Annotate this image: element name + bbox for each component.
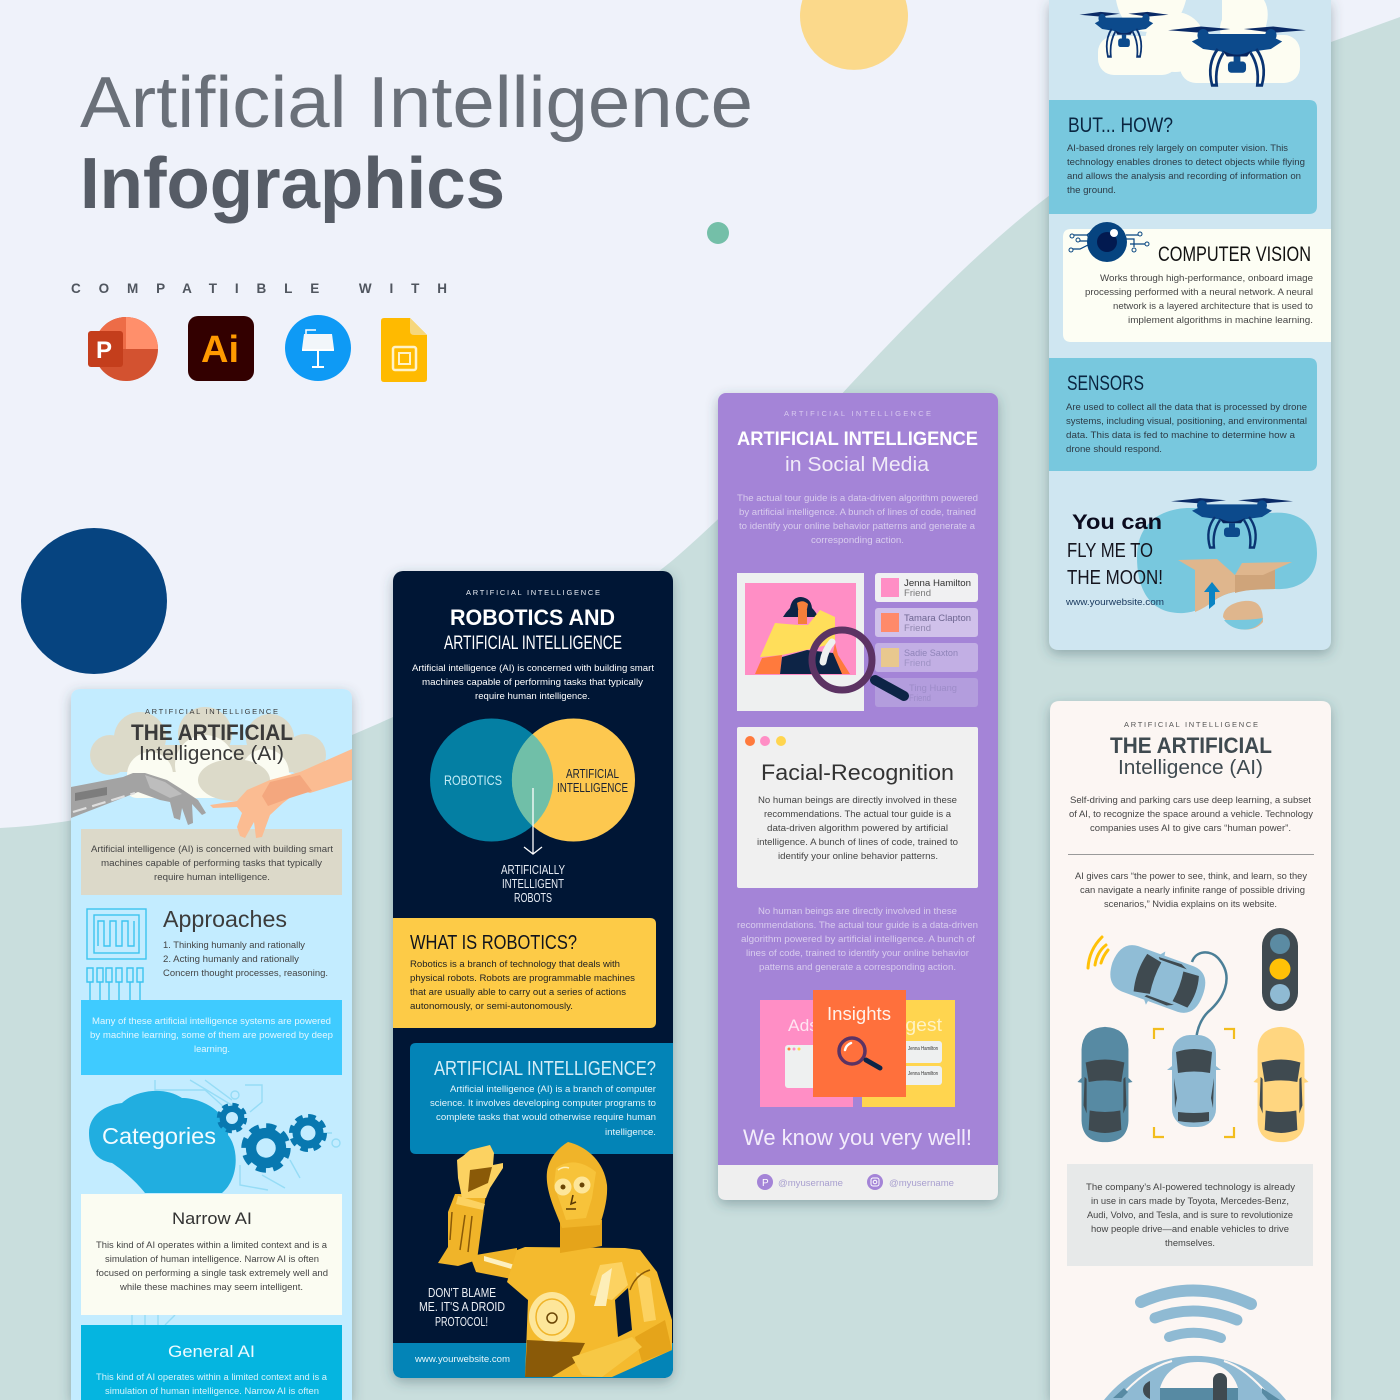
call to action text: www.yourwebsite.com xyxy=(1065,597,1164,608)
what is robotics box: that are usually able to carry out a series of actions xyxy=(410,987,626,998)
artificial intelligence box xyxy=(410,1043,673,1154)
info box: Audi, Volvo, and Tesla, and is sure to revolutionize xyxy=(1087,1210,1293,1221)
sensors box: SENSORS xyxy=(1067,372,1144,395)
info box: how people drive—and enable vehicles to drive xyxy=(1091,1224,1289,1235)
cards: ads, digest, insights xyxy=(760,990,955,1107)
car: right xyxy=(1253,1027,1309,1142)
paragraph: recommendations. The actual tour guide is a data-driven xyxy=(737,920,978,931)
approaches text: 1. Thinking humanly and rationally xyxy=(163,940,305,951)
list item: sadie: Sadie Saxton xyxy=(904,648,958,659)
car: center xyxy=(1167,1035,1221,1127)
venn diagram xyxy=(430,718,635,905)
icon: illustrator: Ai xyxy=(201,329,239,371)
machine learning box: Many of these artificial intelligence systems are powered xyxy=(92,1016,331,1027)
paragraph two: can navigate a nearly infinite range of possible driving xyxy=(1080,885,1305,896)
head xyxy=(547,1142,607,1228)
panel: drones xyxy=(1049,0,1331,650)
sensors box: Are used to collect all the data that is processed by drone xyxy=(1066,402,1307,413)
paragraph two: AI gives cars “the power to see, think, and learn, so they xyxy=(1075,871,1307,882)
machine learning box: learning. xyxy=(194,1044,230,1055)
computer vision box: processing performed with a neural network. A neural xyxy=(1085,287,1313,298)
venn diagram: ARTIFICIALLY xyxy=(501,862,565,877)
artificial intelligence box: science. It involves developing computer programs to xyxy=(430,1098,656,1109)
footer: P xyxy=(762,1178,769,1189)
friends list xyxy=(875,573,978,707)
approaches text: 2. Acting humanly and rationally xyxy=(163,954,299,965)
intro box xyxy=(81,829,342,895)
illustration: robot hand xyxy=(71,773,206,825)
slogan: We know you very well! xyxy=(743,1125,972,1150)
paragraph one xyxy=(1069,795,1313,834)
heading: ARTIFICIAL INTELLIGENCE xyxy=(466,588,600,597)
icon: signal arcs xyxy=(1088,937,1108,968)
icon: eye with circuits xyxy=(1069,222,1149,262)
info box: in use in cars made by Toyota, Mercedes-Benz, xyxy=(1091,1196,1289,1207)
illustration: clouds and drones xyxy=(1079,0,1306,85)
list item: ting: Ting Huang xyxy=(909,683,957,694)
card: digest xyxy=(862,1000,955,1107)
list item: tamara xyxy=(875,608,978,637)
paragraph: No human beings are directly involved in these xyxy=(758,906,957,917)
parking path xyxy=(1192,952,1227,1040)
footer band xyxy=(393,1343,673,1378)
list item: jenna: Jenna Hamilton xyxy=(904,578,971,589)
what is robotics box: WHAT IS ROBOTICS? xyxy=(410,932,577,954)
heading: by artificial intelligence. A bunch of lines of code, trained xyxy=(739,507,976,518)
list item: ting: Friend xyxy=(909,693,931,704)
approaches text xyxy=(163,906,328,979)
raised hand xyxy=(457,1145,503,1198)
paragraph: patterns and generate a corresponding action. xyxy=(759,962,956,973)
facial recognition box: recommendations. The actual tour guide is a xyxy=(764,809,952,820)
call to action text: You can xyxy=(1072,511,1162,534)
list item: jenna xyxy=(875,573,978,602)
card: digest: Digest xyxy=(887,1015,942,1035)
what is robotics box: autonomously, or semi-autonomously. xyxy=(410,1001,573,1012)
heading: ARTIFICIAL INTELLIGENCE xyxy=(1124,720,1258,729)
torso xyxy=(507,1247,672,1377)
heading xyxy=(1110,720,1272,779)
panel: the artificial intelligence xyxy=(71,689,352,1400)
but how box: technology enables drones to detect objects while flying xyxy=(1067,157,1305,168)
info box xyxy=(1067,1164,1313,1266)
heading: The actual tour guide is a data-driven algorithm powered xyxy=(737,493,978,504)
categories illustration: Categories xyxy=(102,1123,216,1149)
footer: @myusername xyxy=(889,1178,954,1189)
illustration: cars xyxy=(1077,928,1309,1142)
artificial intelligence box: complete tasks that would otherwise require human xyxy=(436,1112,656,1123)
intro box: Artificial intelligence (AI) is concerned with building smart xyxy=(91,844,333,855)
intro box: require human intelligence. xyxy=(154,872,270,883)
facial recognition box xyxy=(737,727,978,888)
venn diagram: ROBOTS xyxy=(514,890,552,905)
heading: Artificial intelligence (AI) is concerned with building smart xyxy=(412,663,654,674)
but how box xyxy=(1049,100,1317,214)
venn diagram: INTELLIGENT xyxy=(502,876,564,891)
robot speech text: ME. IT'S A DROID xyxy=(419,1299,505,1314)
but how box: BUT... HOW? xyxy=(1068,114,1173,137)
icon: circuit chip xyxy=(87,909,146,1000)
heading: in Social Media xyxy=(785,454,930,476)
panel: robotics xyxy=(393,571,673,1378)
title: Artificial Intelligence xyxy=(80,63,753,143)
approaches text: Approaches xyxy=(163,906,287,932)
narrow ai box: Narrow AI xyxy=(172,1209,252,1228)
sensors box: drone should respond. xyxy=(1066,444,1162,455)
neck xyxy=(560,1220,602,1253)
heading: corresponding action. xyxy=(811,535,904,546)
illustration: human hand xyxy=(210,749,352,838)
list item: sadie xyxy=(875,643,978,672)
computer vision box: network is a layered architecture that is used to xyxy=(1113,301,1313,312)
computer vision box: Works through high-performance, onboard image xyxy=(1100,273,1313,284)
call to action text xyxy=(1065,511,1164,608)
heading: require human intelligence. xyxy=(475,691,590,702)
heading: machines capable of performing tasks that typically xyxy=(422,677,643,688)
paragraph two: scenarios,” Nvidia explains on its website. xyxy=(1104,899,1277,910)
list item: tamara: Tamara Clapton xyxy=(904,613,971,624)
car: moving xyxy=(1103,936,1212,1022)
facial recognition box: identify your online behavior patterns. xyxy=(778,851,938,862)
card: ads: Ads xyxy=(788,1016,818,1035)
narrow ai box: focused on performing a single task extremely well and xyxy=(96,1268,328,1279)
computer vision box: COMPUTER VISION xyxy=(1158,243,1311,266)
card: digest: Jenna Hamilton xyxy=(908,1046,938,1052)
paragraph one: of AI, to recognize the space around a vehicle. Technology xyxy=(1069,809,1313,820)
heading: ARTIFICIAL INTELLIGENCE xyxy=(737,429,978,450)
narrow ai box: simulation of human intelligence. Narrow AI is often xyxy=(105,1254,319,1265)
icon: google slides xyxy=(381,318,427,382)
footer: @myusername xyxy=(778,1178,843,1189)
heading xyxy=(412,588,654,702)
title text: THE ARTIFICIAL xyxy=(131,720,293,745)
approaches text: Concern thought processes, reasoning. xyxy=(163,968,328,979)
forearm xyxy=(438,1194,486,1266)
heading: ARTIFICIAL INTELLIGENCE xyxy=(784,409,931,418)
illustration: gold robot xyxy=(438,1142,672,1377)
sensors box: systems, including visual, positioning, and environmental xyxy=(1066,416,1307,427)
venn diagram: INTELLIGENCE xyxy=(557,780,628,795)
but how box: AI-based drones rely largely on computer vision. This xyxy=(1067,143,1288,154)
general ai box xyxy=(81,1325,342,1400)
list item: tamara: Friend xyxy=(904,623,931,634)
general ai box: This kind of AI operates within a limited context and is a xyxy=(96,1372,328,1383)
but how box: and allows the analysis and recording of information on xyxy=(1067,171,1301,182)
card: insights xyxy=(813,990,906,1097)
footer band: www.yourwebsite.com xyxy=(414,1354,510,1365)
heading: to identify your online behavior patterns and generate a xyxy=(739,521,976,532)
decorative circle: navy xyxy=(21,528,167,674)
icon: powerpoint xyxy=(88,317,158,381)
info box: themselves. xyxy=(1165,1238,1215,1249)
illustration: photo with magnifier xyxy=(737,573,904,711)
icon: keynote xyxy=(285,315,351,381)
general ai box: General AI xyxy=(168,1342,255,1361)
robot speech text: PROTOCOL! xyxy=(435,1314,488,1329)
computer vision box: implement algorithms in machine learning. xyxy=(1128,315,1313,326)
facial recognition box: Facial-Recognition xyxy=(761,760,954,785)
what is robotics box: Robotics is a branch of technology that deals with xyxy=(410,959,620,970)
machine learning box: by machine learning, some of them are powered by deep xyxy=(90,1030,333,1041)
belly and right hand xyxy=(525,1340,585,1377)
paragraph one: companies uses AI to give cars “human power”. xyxy=(1090,823,1291,834)
but how box: the ground. xyxy=(1067,185,1116,196)
machine learning box xyxy=(81,1000,342,1075)
sensors box: data. This data is fed to machine to determine how a xyxy=(1066,430,1296,441)
robot speech text xyxy=(419,1285,505,1329)
list item: ting xyxy=(875,678,978,707)
list item: jenna: Friend xyxy=(904,588,931,599)
icon: wifi arcs xyxy=(1141,1290,1251,1338)
artificial intelligence box: ARTIFICIAL INTELLIGENCE? xyxy=(434,1058,656,1080)
icon: powerpoint: P xyxy=(96,337,112,364)
heading: Intelligence (AI) xyxy=(1118,757,1263,779)
card: ads xyxy=(760,1000,853,1107)
title text xyxy=(131,707,293,765)
narrow ai box xyxy=(81,1194,342,1315)
heading: ROBOTICS AND xyxy=(450,605,615,630)
narrow ai box: This kind of AI operates within a limited context and is a xyxy=(96,1240,328,1251)
title text: ARTIFICIAL INTELLIGENCE xyxy=(145,707,278,716)
info box: The company’s AI-powered technology is already xyxy=(1086,1182,1295,1193)
call to action text: FLY ME TO xyxy=(1067,540,1153,562)
title: Infographics xyxy=(80,144,505,224)
what is robotics box: physical robots. Robots are programmable machines xyxy=(410,973,635,984)
paragraph: lines of code, trained to identify your online behavior xyxy=(746,948,970,959)
panel: self-driving cars xyxy=(1050,701,1331,1400)
paragraph xyxy=(737,906,978,973)
intro box: machines capable of performing tasks that typically xyxy=(101,858,322,869)
card: digest: Jenna Hamilton xyxy=(908,1071,938,1077)
facial recognition box: intelligence. A bunch of lines of code, trained to xyxy=(757,837,958,848)
chest disc xyxy=(529,1292,575,1342)
upper arm xyxy=(470,1248,517,1280)
facial recognition box: data-driven algorithm powered by artificial xyxy=(767,823,948,834)
artificial intelligence box: Artificial intelligence (AI) is a branch of computer xyxy=(450,1084,657,1095)
venn diagram: ARTIFICIAL xyxy=(566,766,619,781)
title xyxy=(80,63,753,224)
computer vision box xyxy=(1063,222,1331,342)
paragraph one: Self-driving and parking cars use deep learning, a subset xyxy=(1070,795,1311,806)
what is robotics box xyxy=(393,918,656,1028)
illustration: car dome xyxy=(1104,1356,1286,1400)
title text: Intelligence (AI) xyxy=(139,743,284,765)
list item: sadie: Friend xyxy=(904,658,931,669)
traffic light xyxy=(1262,928,1298,1011)
panel: social media xyxy=(718,393,998,1200)
parking brackets xyxy=(1154,1029,1234,1137)
general ai box: simulation of human intelligence. Narrow AI is often xyxy=(105,1386,319,1397)
facial recognition box: No human beings are directly involved in these xyxy=(758,795,957,806)
footer xyxy=(718,1165,998,1200)
illustration: drone delivery xyxy=(1137,498,1317,630)
sensors box xyxy=(1049,358,1317,471)
card: insights: Insights xyxy=(827,1004,891,1024)
decorative circle: yellow xyxy=(800,0,908,70)
paragraph: algorithm powered by artificial intelligence. A bunch of xyxy=(741,934,975,945)
venn diagram: ROBOTICS xyxy=(444,772,502,788)
car: left xyxy=(1077,1027,1133,1142)
paragraph two xyxy=(1075,871,1307,910)
icon: illustrator xyxy=(188,316,254,381)
compatible with label: COMPATIBLE WITH xyxy=(71,281,447,296)
categories illustration xyxy=(89,1080,340,1325)
robot speech text: DON'T BLAME xyxy=(428,1285,496,1300)
heading xyxy=(737,409,978,546)
heading: THE ARTIFICIAL xyxy=(1110,733,1272,758)
decorative circle: teal xyxy=(707,222,729,244)
artificial intelligence box: intelligence. xyxy=(605,1127,656,1138)
heading: ARTIFICIAL INTELLIGENCE xyxy=(444,633,622,654)
illustration: clouds xyxy=(90,707,326,801)
narrow ai box: while these machines may seem intelligent. xyxy=(119,1282,303,1293)
call to action text: THE MOON! xyxy=(1067,567,1163,589)
